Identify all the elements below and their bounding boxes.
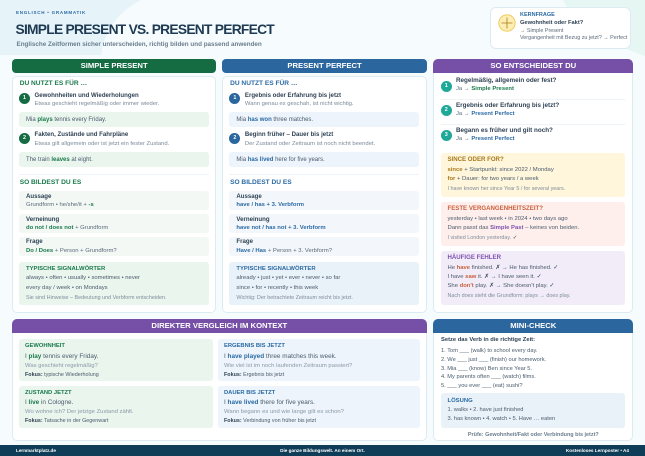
box: häufige Fehler: She don't play. ✗ → She doesn't play. ✓ xyxy=(447,283,554,289)
step 2: Ergebnis oder Erfahrung bis jetzt? xyxy=(456,102,559,109)
exercise list: 5. ___ you ever ___ (eat) sushi? xyxy=(441,383,523,389)
header block xyxy=(16,10,275,48)
kicker: ENGLISCH • GRAMMATIK xyxy=(16,10,86,15)
form: Aussage: Aussage xyxy=(236,193,262,200)
callout text: Gewohnheit oder Fakt? xyxy=(520,20,583,26)
panel header: SIMPLE PRESENT xyxy=(81,61,148,70)
compare: Dauer bis jetzt: I have lived there for five years. xyxy=(224,399,315,406)
panel header xyxy=(433,319,633,333)
exercise list: Setze das Verb in die richtige Zeit: xyxy=(441,337,535,343)
form: Frage xyxy=(229,237,419,256)
signal words: every day / week • on Mondays xyxy=(26,285,108,291)
box: since oder for: I have known her since Year 5 / for several years. xyxy=(447,186,565,192)
exercise list: 2. We ___ just ___ (finish) our homework. xyxy=(441,357,546,363)
callout: Kernfrage xyxy=(490,7,631,49)
compare: Ergebnis bis jetzt: Wie viel ist im noch laufenden Zeitraum passiert? xyxy=(224,363,352,369)
panel: Present Perfect xyxy=(222,59,427,313)
use 2: Fakten, Zustände und Fahrpläne xyxy=(34,131,128,138)
title: SIMPLE PRESENT VS. PRESENT PERFECT xyxy=(16,22,274,37)
panel card: SO BILDEST DU ES xyxy=(230,179,292,186)
compare: Zustand jetzt: Fokus: Tatsache in der Gegenwart xyxy=(25,418,108,424)
compare: Zustand jetzt xyxy=(19,386,213,428)
solution box: 1. walks • 2. have just finished xyxy=(447,407,523,413)
form: Aussage xyxy=(229,191,419,210)
step 3: 3 xyxy=(445,132,448,138)
example 1: Mia has won three matches. xyxy=(236,117,313,123)
callout text: Vergangenheit mit Bezug zu jetzt? → Perfect xyxy=(520,35,627,41)
panel: So entscheidest du xyxy=(433,59,633,313)
panel: Direkter Vergleich xyxy=(12,319,427,441)
callout text: → Simple Present xyxy=(520,28,563,34)
exercise list: 1. Tom ___ (walk) to school every day. xyxy=(441,348,538,354)
use 1: Ergebnis oder Erfahrung bis jetzt xyxy=(245,92,341,99)
signal words: since • for • recently • this week xyxy=(236,285,318,291)
footer bar: Die ganze Bildungswelt. An einem Ort. xyxy=(280,448,365,453)
compare: Zustand jetzt: I live in Cologne. xyxy=(25,399,73,406)
example 1 xyxy=(19,112,209,127)
panel: Mini-Check xyxy=(433,319,633,441)
use 2: Etwas gilt allgemein oder ist jetzt ein fester Zustand. xyxy=(34,141,169,147)
panel card: DU NUTZT ES FÜR … xyxy=(20,80,87,87)
form: Frage: Frage xyxy=(236,238,253,245)
compare: Dauer bis jetzt: DAUER BIS JETZT xyxy=(224,390,275,396)
compare: Zustand jetzt: Wo wohne ich? Der jetzige Zustand zählt. xyxy=(25,409,134,415)
box: feste Vergangenheitszeit: FESTE VERGANGENHEITSZEIT? xyxy=(447,205,543,212)
solution box: LÖSUNG xyxy=(447,398,473,404)
form: Verneinung: Verneinung xyxy=(236,216,270,223)
exercise list xyxy=(441,337,546,389)
form: Aussage: Grundform • he/she/it + -s xyxy=(26,202,94,208)
step 2 xyxy=(441,102,559,117)
compare: Dauer bis jetzt xyxy=(218,386,420,428)
box: since oder for xyxy=(441,153,625,197)
example 1 xyxy=(229,112,419,127)
form: Frage: Frage xyxy=(26,238,43,245)
callout text: KERNFRAGE xyxy=(520,12,555,18)
example 2 xyxy=(19,152,209,167)
step 3: Begann es früher und gilt noch? xyxy=(456,127,553,134)
box: feste Vergangenheitszeit: yesterday • last week • in 2024 • two days ago xyxy=(447,216,568,222)
compare: Gewohnheit: Was geschieht regelmäßig? xyxy=(25,363,98,369)
signal words: TYPISCHE SIGNALWÖRTER xyxy=(236,266,316,272)
solution box: 3. has known • 4. watch • 5. Have … eaten xyxy=(447,416,555,422)
step 1 xyxy=(441,77,556,92)
box: feste Vergangenheitszeit: I visited London yesterday. ✓ xyxy=(447,235,517,241)
compare: Ergebnis bis jetzt: I have played three matches this week. xyxy=(224,353,337,360)
background blobs xyxy=(0,0,645,56)
use 2: Beginn früher – Dauer bis jetzt xyxy=(245,131,333,138)
footer bar xyxy=(0,445,645,456)
example 1: Mia plays tennis every Friday. xyxy=(26,117,106,123)
signal words xyxy=(229,262,419,305)
subtitle: Englische Zeitformen sicher unterscheiden, richtig bilden und passend anwenden xyxy=(16,41,262,48)
step 1: Regelmäßig, allgemein oder fest? xyxy=(456,77,556,84)
solution box xyxy=(441,393,625,428)
panel header xyxy=(222,59,427,73)
form: Verneinung xyxy=(19,214,209,233)
use 2: 2 xyxy=(23,135,26,141)
compare: Dauer bis jetzt: Fokus: Verbindung von früher bis jetzt xyxy=(224,418,316,424)
box: häufige Fehler xyxy=(441,251,625,305)
example 2: The train leaves at eight. xyxy=(26,157,93,163)
form: Aussage: Aussage xyxy=(26,193,51,200)
box: häufige Fehler: He have finished. ✗ → He has finished. ✓ xyxy=(447,265,558,271)
step 2: 2 xyxy=(445,107,448,113)
box: since oder for: since + Startpunkt: since 2022 / Monday xyxy=(447,167,554,173)
form: Aussage xyxy=(19,191,209,210)
use 1 xyxy=(229,92,354,107)
use 1: Wann genau es geschah, ist nicht wichtig. xyxy=(245,101,354,107)
compare: Gewohnheit: Fokus: typische Wiederholung xyxy=(25,372,99,378)
panel card: DU NUTZT ES FÜR … xyxy=(230,80,297,87)
panel header: PRESENT PERFECT xyxy=(287,61,362,70)
use 2: 2 xyxy=(233,135,236,141)
compare: Ergebnis bis jetzt: Fokus: Ergebnis bis jetzt xyxy=(224,372,284,378)
compare: Dauer bis jetzt: Wann begann es und wie lange gilt es schon? xyxy=(224,409,344,415)
form: Frage xyxy=(19,237,209,256)
signal words xyxy=(19,262,209,305)
box: since oder for: SINCE ODER FOR? xyxy=(447,156,504,163)
compare: Gewohnheit xyxy=(19,339,213,381)
compare: Ergebnis bis jetzt xyxy=(218,339,420,381)
exercise list: 3. Mia ___ (know) Ben since Year 5. xyxy=(441,366,532,372)
use 1 xyxy=(19,92,159,107)
use 2 xyxy=(19,131,169,147)
use 1: Etwas geschieht regelmäßig oder immer wieder. xyxy=(34,101,159,107)
signal words: Wichtig: Der betrachtete Zeitraum reicht bis jetzt. xyxy=(236,295,353,301)
compare: Ergebnis bis jetzt: ERGEBNIS BIS JETZT xyxy=(224,343,285,349)
panel header xyxy=(433,59,633,73)
example 2 xyxy=(229,152,419,167)
compare: Gewohnheit: I play tennis every Friday. xyxy=(25,353,98,360)
form: Verneinung xyxy=(229,214,419,233)
signal words: already • just • yet • ever • never • so far xyxy=(236,275,340,281)
box: häufige Fehler: I have saw it. ✗ → I have seen it. ✓ xyxy=(447,274,542,280)
signal words: always • often • usually • sometimes • never xyxy=(26,275,140,281)
use 1: 1 xyxy=(233,95,236,101)
compare: Gewohnheit: GEWOHNHEIT xyxy=(25,343,65,349)
callout text xyxy=(520,12,628,41)
icon: plus in circle xyxy=(498,14,516,32)
form: Frage: Have / Has + Person + 3. Verbform? xyxy=(236,248,332,254)
use 2 xyxy=(229,131,375,147)
form: Aussage: have / has + 3. Verbform xyxy=(236,202,304,208)
footer bar: Kostenloses Lernposter • A4 xyxy=(566,448,629,453)
box: häufige Fehler: Nach does steht die Grundform: plays → does play. xyxy=(447,293,571,299)
signal words: Sie sind Hinweise – Bedeutung und Verbform entscheiden. xyxy=(26,295,167,301)
form: Verneinung: do not / does not + Grundform xyxy=(26,225,108,231)
step 1: Ja → Simple Present xyxy=(456,86,514,92)
compare: Zustand jetzt: ZUSTAND JETZT xyxy=(25,390,72,396)
panel header xyxy=(12,319,427,333)
step 3 xyxy=(441,127,553,142)
use 1: Gewohnheiten und Wiederholungen xyxy=(34,92,139,99)
box: feste Vergangenheitszeit xyxy=(441,202,625,246)
step 2: Ja → Present Perfect xyxy=(456,111,515,117)
box: häufige Fehler: HÄUFIGE FEHLER xyxy=(447,254,501,261)
form: Verneinung: have not / has not + 3. Verbform xyxy=(236,225,326,231)
box: feste Vergangenheitszeit: Dann passt das Simple Past – keines von beiden. xyxy=(447,225,579,231)
exercise list: 4. My parents often ___ (watch) films. xyxy=(441,374,536,380)
panel: Simple Present xyxy=(12,59,216,313)
panel card: SO BILDEST DU ES xyxy=(20,179,81,186)
form: Frage: Do / Does + Person + Grundform? xyxy=(26,248,117,254)
panel header xyxy=(12,59,216,73)
use 2: Der Zustand oder Zeitraum ist noch nicht beendet. xyxy=(245,141,375,147)
step 3: Ja → Present Perfect xyxy=(456,136,515,142)
panel header: MINI-CHECK xyxy=(510,321,556,330)
signal words: TYPISCHE SIGNALWÖRTER xyxy=(26,266,105,272)
panel header: SO ENTSCHEIDEST DU xyxy=(490,61,576,70)
panel card xyxy=(222,76,427,313)
example 2: Mia has lived here for five years. xyxy=(236,157,325,163)
box: since oder for: for + Dauer: for two years / a week xyxy=(447,176,539,182)
panel card xyxy=(12,76,216,313)
footer bar: Lernmarktplatz.de xyxy=(16,448,56,453)
closing prompt: Prüfe: Gewohnheit/Fakt oder Verbindung bis jetzt? xyxy=(468,432,599,438)
panel header: DIREKTER VERGLEICH IM KONTEXT xyxy=(151,321,287,330)
use 1: 1 xyxy=(23,95,26,101)
form: Verneinung: Verneinung xyxy=(26,216,59,223)
step 1: 1 xyxy=(445,83,448,89)
